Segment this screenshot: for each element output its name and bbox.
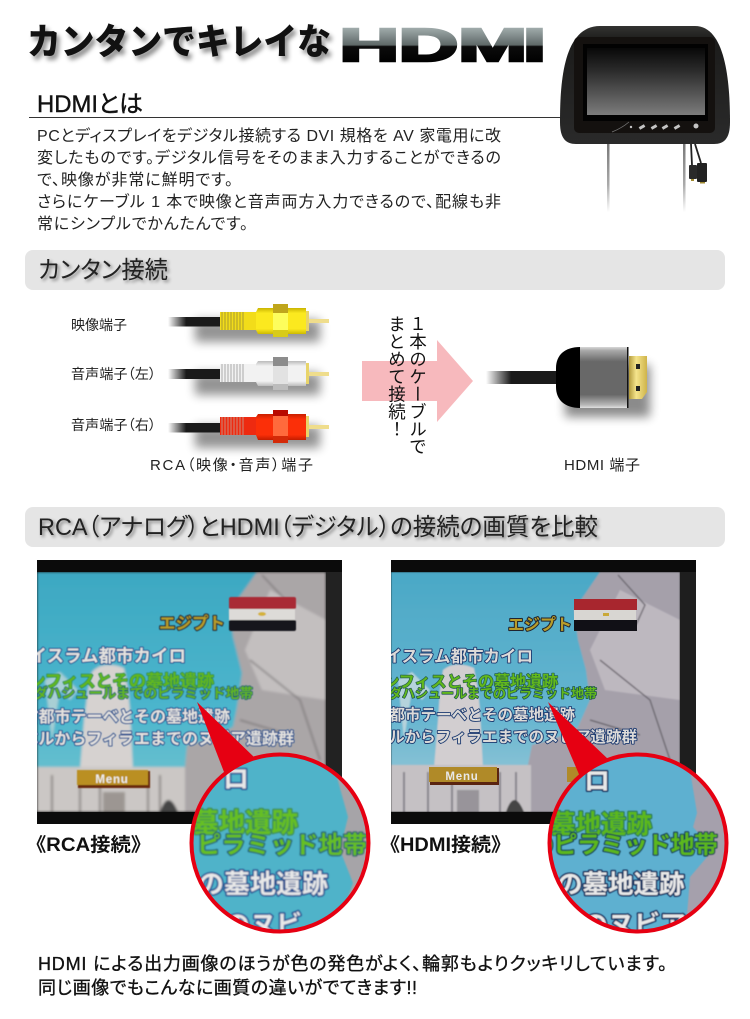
screen menu text: イスラム都市カイロ [385, 643, 533, 667]
icon: white RCA plug [168, 357, 329, 395]
screen menu text: イスラム都市カイロ [30, 643, 186, 668]
callout: HDMI magnified circle: 墓地遺跡 [550, 804, 653, 841]
callout: HDMI magnified circle [548, 752, 728, 934]
screen menu text: ダハシュールまでのピラミッド地帯 [34, 682, 253, 702]
icon: red RCA plug [168, 410, 329, 448]
icon: yellow RCA plug [168, 304, 329, 342]
text block: HDMI description: 常にシンプルでかんたんです。 [37, 215, 248, 233]
label: RCA端子: RCA（映像・音声）端子 [150, 456, 313, 474]
callout: HDMI magnified circle: の墓地遺跡 [557, 864, 685, 901]
screen menu text: Menu [95, 774, 129, 786]
icon: headrest monitor [560, 26, 730, 212]
arrow: RCA callout pointer [197, 702, 255, 772]
callout: RCA magnified circle: 墓地遺跡 [192, 801, 298, 840]
text block: HDMI description: PCとディスプレイをデジタル接続する DVI 規格を AV 家電用に改 [37, 126, 501, 145]
text block: vertical callout: まとめて接続！ [384, 315, 410, 438]
screen menu text: 古都市テーベとその墓地遺跡 [374, 703, 575, 725]
icon: Egyptian flag [229, 597, 296, 631]
panel: カンタン接続 heading bar [25, 250, 725, 290]
screen menu text: 古都市テーベとその墓地遺跡 [22, 703, 230, 727]
panel: RCA screen photo [37, 560, 342, 824]
screen menu text: アブシンベルからフィラエまでのヌビア遺跡群 [312, 725, 637, 747]
screen menu text: メンフィスとその墓地遺跡 [367, 668, 558, 692]
screen menu text: Menu [445, 771, 479, 783]
panel: 画質比較 heading bar: RCA（アナログ）とHDMI（デジタル）の接続の画質を比較 [38, 514, 598, 541]
label: 映像端子: 映像端子 [71, 317, 127, 333]
text block: vertical callout: １本のケーブルで [406, 315, 430, 455]
screen menu text: ダハシュールまでのピラミッド地帯 [389, 683, 597, 702]
text block: conclusion: 同じ画像でもこんなに画質の違いがでてきます!! [38, 978, 417, 998]
screen menu text [391, 615, 638, 785]
screen menu text: メンフィスとその墓地遺跡 [11, 667, 214, 692]
callout: RCA magnified circle [191, 754, 372, 942]
icon: HDMI plug [486, 347, 650, 417]
callout: RCA magnified circle: ロ [223, 759, 249, 796]
title: カンタンでキレイな [27, 13, 331, 65]
arrow: HDMI callout pointer [548, 702, 609, 779]
text block: HDMI description: で、映像が非常に鮮明です。 [37, 171, 233, 189]
icon: Egyptian flag [574, 599, 637, 631]
callout: RCA magnified circle: のヌビ [224, 905, 302, 942]
label: 音声端子（左）: 音声端子（左） [71, 366, 156, 382]
text block: conclusion [38, 954, 667, 998]
title [27, 13, 546, 71]
title: HDMI [339, 20, 546, 71]
label: 音声端子（右）: 音声端子（右） [71, 417, 156, 433]
text block: conclusion: HDMI による出力画像のほうが色の発色がよく、輪郭もよりクッキリしています。 [38, 954, 667, 974]
label: RCA接続: 《RCA接続》 [36, 834, 141, 856]
panel: カンタン接続 heading bar: カンタン接続 [38, 257, 168, 284]
arrow: pink arrow [362, 340, 473, 422]
callout: HDMI magnified circle: のピラミッド地帯 [530, 825, 718, 860]
screen menu text: エジプト [159, 610, 225, 634]
callout: HDMI magnified circle: ロ [584, 761, 610, 798]
screen menu text [37, 612, 296, 789]
panel: 画質比較 heading bar [25, 507, 725, 547]
text block: HDMI description [37, 126, 501, 233]
panel: HDMI screen photo [391, 560, 696, 824]
callout: HDMI magnified circle: のヌビア [582, 905, 686, 942]
text block: vertical callout [384, 315, 430, 455]
callout: RCA magnified circle: の墓地遺跡 [198, 864, 328, 901]
label: HDMI端子: HDMI 端子 [564, 457, 640, 474]
screen menu text: エジプト [508, 611, 572, 635]
text block: HDMI description: 変したものです。デジタル信号をそのまま入力することができるの [37, 148, 501, 167]
text block: HDMI description: さらにケーブル 1 本で映像と音声両方入力できるので、配線も非 [37, 192, 501, 211]
callout: RCA magnified circle: ピラミッド地帯 [197, 825, 367, 860]
heading: HDMIとは: HDMIとは [37, 91, 143, 118]
label: HDMI接続: 《HDMI接続》 [390, 834, 501, 856]
